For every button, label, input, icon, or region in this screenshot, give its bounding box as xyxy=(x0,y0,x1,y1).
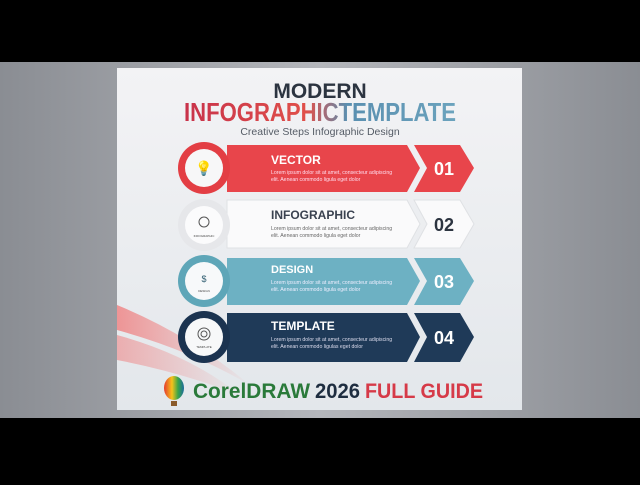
card background xyxy=(117,68,522,410)
row 3: design: Lorem ipsum dolor sit at amet, consecteur adipiscing xyxy=(271,280,392,286)
row 1: vector: 01 xyxy=(434,159,454,179)
row 4: template xyxy=(178,311,474,363)
gray frame xyxy=(0,62,640,418)
row 1: vector: elit. Aenean commodo ligula eget dolor xyxy=(271,177,361,183)
row 1: vector: 💡 xyxy=(195,160,213,177)
row 3: design: 03 xyxy=(434,272,454,292)
icon: balloon logo xyxy=(164,376,184,406)
row 2: infographic: INFOGRAPHIC xyxy=(271,208,355,222)
footer title xyxy=(193,380,483,403)
row 3: design xyxy=(178,255,474,307)
row 1: vector xyxy=(178,142,474,194)
row 2: infographic: 02 xyxy=(434,215,454,235)
footer title: CorelDRAW xyxy=(193,380,310,403)
title: INFOGRAPHICTEMPLATE xyxy=(184,97,456,127)
footer title: FULL GUIDE xyxy=(365,380,483,403)
row 1: vector: VECTOR xyxy=(271,153,321,167)
row 4: template: TEMPLATE xyxy=(271,319,335,333)
title xyxy=(184,80,456,138)
row 3: design: DESIGN xyxy=(198,289,210,293)
row 2: infographic: elit. Aenean commodo ligula eget dolor xyxy=(271,233,361,239)
row 1: vector: Lorem ipsum dolor sit at amet, consecteur adipiscing xyxy=(271,170,392,176)
row 3: design: $ xyxy=(201,274,207,284)
row 4: template: TEMPLATE xyxy=(196,345,212,349)
decorative red swoosh xyxy=(117,305,250,395)
title: MODERN xyxy=(273,80,367,103)
row 2: infographic: INFOGRAPHIC xyxy=(194,234,215,238)
row 4: template: Lorem ipsum dolor sit at amet, consecteur adipiscing xyxy=(271,337,392,343)
row 4: template: 04 xyxy=(434,328,454,348)
row 2: infographic xyxy=(178,199,474,251)
title: Creative Steps Infographic Design xyxy=(240,126,400,138)
row 4: template: elit. Aenean commodo ligulas eget dolor xyxy=(271,344,363,350)
footer title: 2026 xyxy=(315,380,360,403)
row 3: design: DESIGN xyxy=(271,264,313,276)
row 3: design: elit. Aenean commodo ligula eget dolor xyxy=(271,287,361,293)
row 2: infographic: Lorem ipsum dolor sit at amet, consecteur adipiscing xyxy=(271,226,392,232)
